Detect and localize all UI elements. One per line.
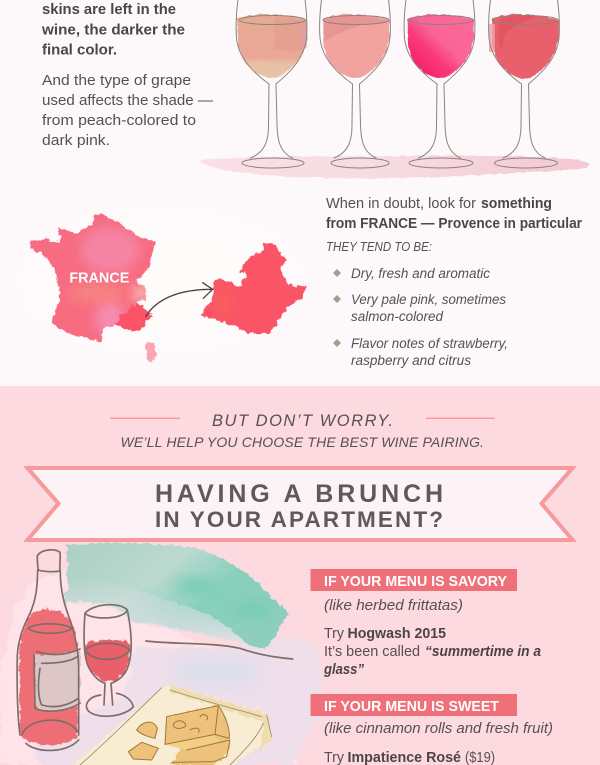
heading: but don't worry (110, 412, 495, 450)
map: France and Provence (17, 207, 307, 364)
list: Provence rosé traits: Flavor notes of strawberry, (351, 336, 508, 351)
table shadow (197, 155, 589, 178)
page background (0, 0, 600, 386)
heading: but don't worry: BUT DON’T WORRY. (212, 412, 393, 430)
glass 3 (404, 0, 475, 168)
banner: having a brunch (28, 468, 572, 540)
illustration: rosé, glass and cheese (0, 543, 320, 765)
glass 2 (320, 0, 390, 168)
section: savory menu: IF YOUR MENU IS SAVORY (324, 573, 507, 590)
text block: grape skins: dark pink. (42, 132, 110, 149)
France shape (29, 213, 156, 342)
list: Provence rosé traits: salmon-colored (351, 309, 443, 324)
section: savory menu: “summertime in a (425, 644, 541, 660)
section: savory menu: (like herbed frittatas) (324, 598, 463, 614)
cheese wedge (165, 706, 230, 765)
list: Provence rosé traits: Very pale pink, sometimes (351, 292, 506, 307)
section: sweet menu (310, 694, 553, 765)
illustration: four wine glasses (197, 0, 589, 178)
text block: look for France: from FRANCE — Provence in particular (326, 216, 582, 232)
knife stroke (146, 641, 293, 659)
text block: look for France (326, 196, 582, 254)
text block: grape skins: wine, the darker the (41, 22, 185, 38)
banner: having a brunch: IN YOUR APARTMENT? (155, 507, 443, 532)
section: savory menu (310, 569, 541, 678)
wine glass (84, 605, 133, 716)
list: Provence rosé traits: Dry, fresh and aromatic (351, 266, 490, 281)
text block: look for France: When in doubt, look for (326, 196, 476, 212)
text block: grape skins: used affects the shade — (42, 92, 213, 109)
list: Provence rosé traits: raspberry and citrus (351, 353, 471, 368)
banner: having a brunch: HAVING A BRUNCH (155, 480, 443, 508)
Provence highlight on France (115, 302, 153, 332)
France label: FRANCE (69, 270, 129, 286)
text block: grape skins (41, 1, 213, 149)
text block: grape skins: final color. (42, 42, 117, 58)
cheese board (72, 684, 272, 765)
section: savory menu: Hogwash 2015 (348, 626, 446, 642)
text block: look for France: something (481, 196, 552, 212)
text block: grape skins: And the type of grape (42, 72, 191, 89)
heading: but don't worry: WE’LL HELP YOU CHOOSE THE BEST WINE PAIRING. (120, 434, 484, 450)
text block: look for France: THEY TEND TO BE: (326, 239, 432, 254)
text block: grape skins: from peach-colored to (42, 112, 196, 129)
glass 1 (236, 0, 308, 168)
text block: grape skins: skins are left in the (42, 1, 176, 18)
section: savory menu: Try (324, 626, 345, 642)
section: savory menu: It’s been called (324, 644, 420, 660)
pink section background (0, 386, 600, 765)
section: savory menu: glass” (323, 662, 365, 678)
section: sweet menu: IF YOUR MENU IS SWEET (324, 698, 499, 715)
section: sweet menu: (like cinnamon rolls and fresh fruit) (324, 721, 553, 737)
watercolor washes (0, 568, 300, 765)
glass 4 (489, 0, 559, 168)
Corsica (145, 340, 156, 364)
bottle (17, 550, 80, 750)
arrow (146, 283, 213, 317)
Provence enlarged (198, 243, 307, 334)
list: Provence rosé traits (333, 266, 508, 368)
